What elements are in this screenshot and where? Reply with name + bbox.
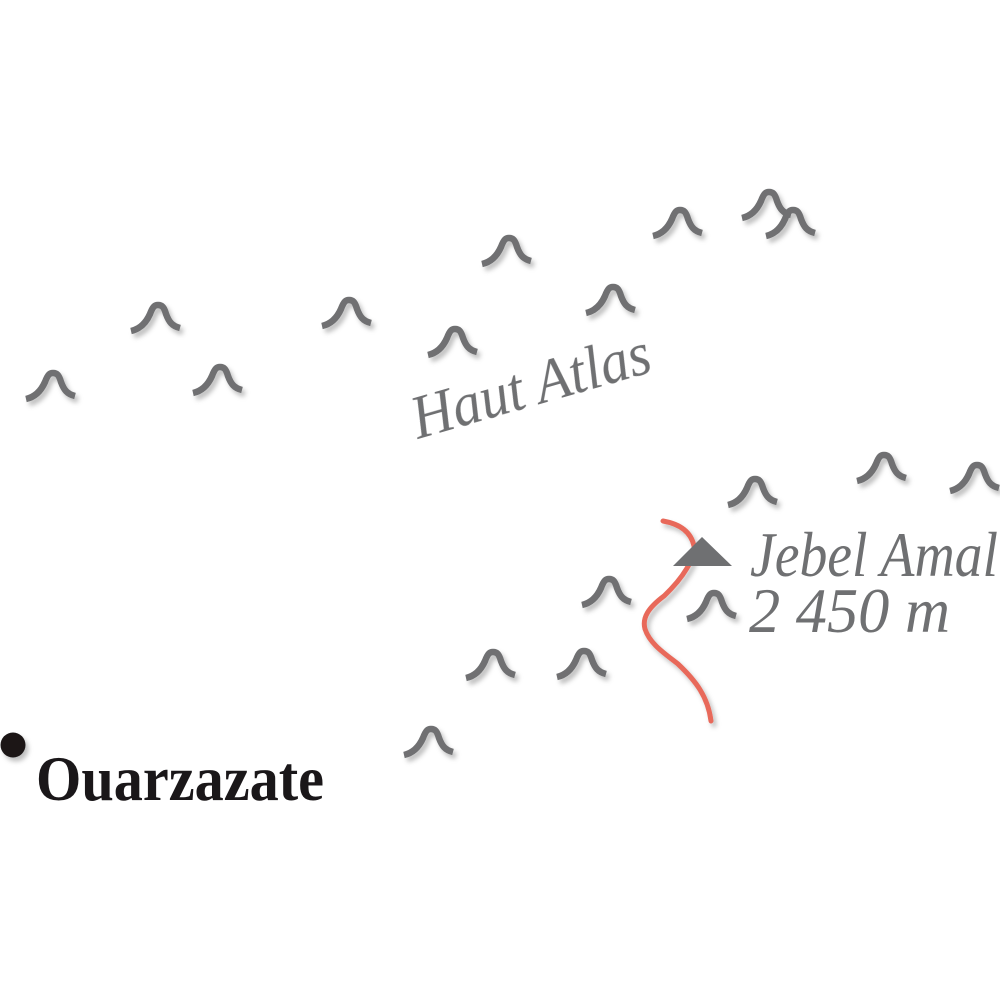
mountain range symbols (26, 192, 999, 755)
city marker: Ouarzazate (0, 732, 26, 758)
red route line (644, 521, 711, 721)
label: Jebel Amal elevation (749, 519, 998, 646)
label: Jebel Amal elevation: 2 450 m (749, 575, 950, 646)
label: Haut Atlas: Haut Atlas (402, 320, 658, 453)
city label: Ouarzazate: Ouarzazate (36, 743, 324, 814)
summit triangle icon (673, 537, 732, 566)
